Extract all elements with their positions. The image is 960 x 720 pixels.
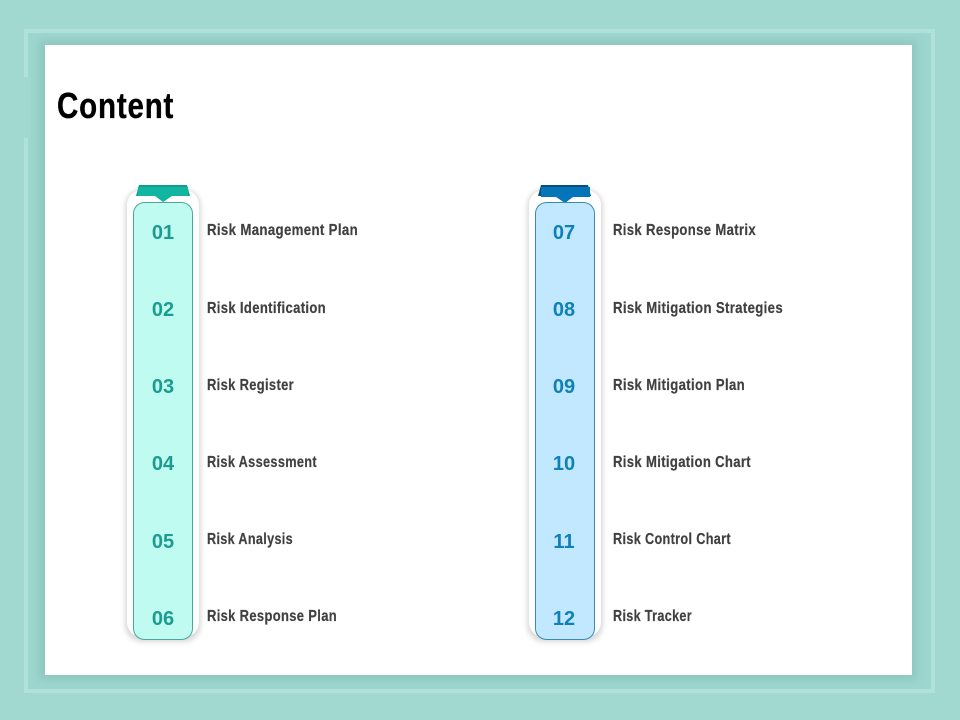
numbers: 02 — [152, 299, 174, 321]
numbers: 01 — [152, 222, 174, 244]
numbers: 09 — [553, 376, 575, 398]
numbers: 04 — [152, 453, 175, 475]
numbers: 10 — [553, 453, 575, 475]
title: Content — [57, 85, 174, 126]
numbers: 05 — [152, 531, 174, 553]
numbers — [152, 222, 175, 630]
icon: blue ribbon tab — [538, 185, 591, 203]
text block: left column labels: Risk Identification — [207, 300, 326, 317]
panel: numbers column 01 to 06 — [125, 185, 201, 642]
text block: left column labels: Risk Response Plan — [207, 608, 337, 625]
text block: right column labels: Risk Tracker — [613, 608, 692, 625]
text block: right column labels: Risk Mitigation Strategies — [613, 300, 783, 317]
text block: right column labels: Risk Control Chart — [613, 531, 731, 548]
text block: left column labels: Risk Analysis — [207, 531, 293, 548]
numbers: 06 — [152, 608, 174, 630]
numbers — [553, 222, 575, 630]
text block: left column labels: Risk Register — [207, 377, 294, 394]
numbers: 03 — [152, 376, 174, 398]
text block: left column labels: Risk Assessment — [207, 454, 317, 471]
icon: teal ribbon tab — [136, 185, 190, 202]
numbers: 12 — [553, 608, 575, 630]
text block: right column labels: Risk Mitigation Chart — [613, 454, 751, 471]
text block: right column labels: Risk Response Matrix — [613, 222, 756, 239]
text block: right column labels — [613, 222, 783, 625]
numbers: 08 — [553, 299, 575, 321]
text block: left column labels — [207, 222, 358, 625]
numbers: 07 — [553, 222, 575, 244]
panel: numbers column 07 to 12 — [527, 185, 603, 642]
text block: left column labels: Risk Management Plan — [207, 222, 358, 239]
numbers: 11 — [553, 531, 575, 553]
number strip — [536, 202, 594, 640]
panel: white content card — [45, 45, 912, 675]
number strip — [134, 202, 192, 640]
text block: right column labels: Risk Mitigation Plan — [613, 377, 745, 394]
